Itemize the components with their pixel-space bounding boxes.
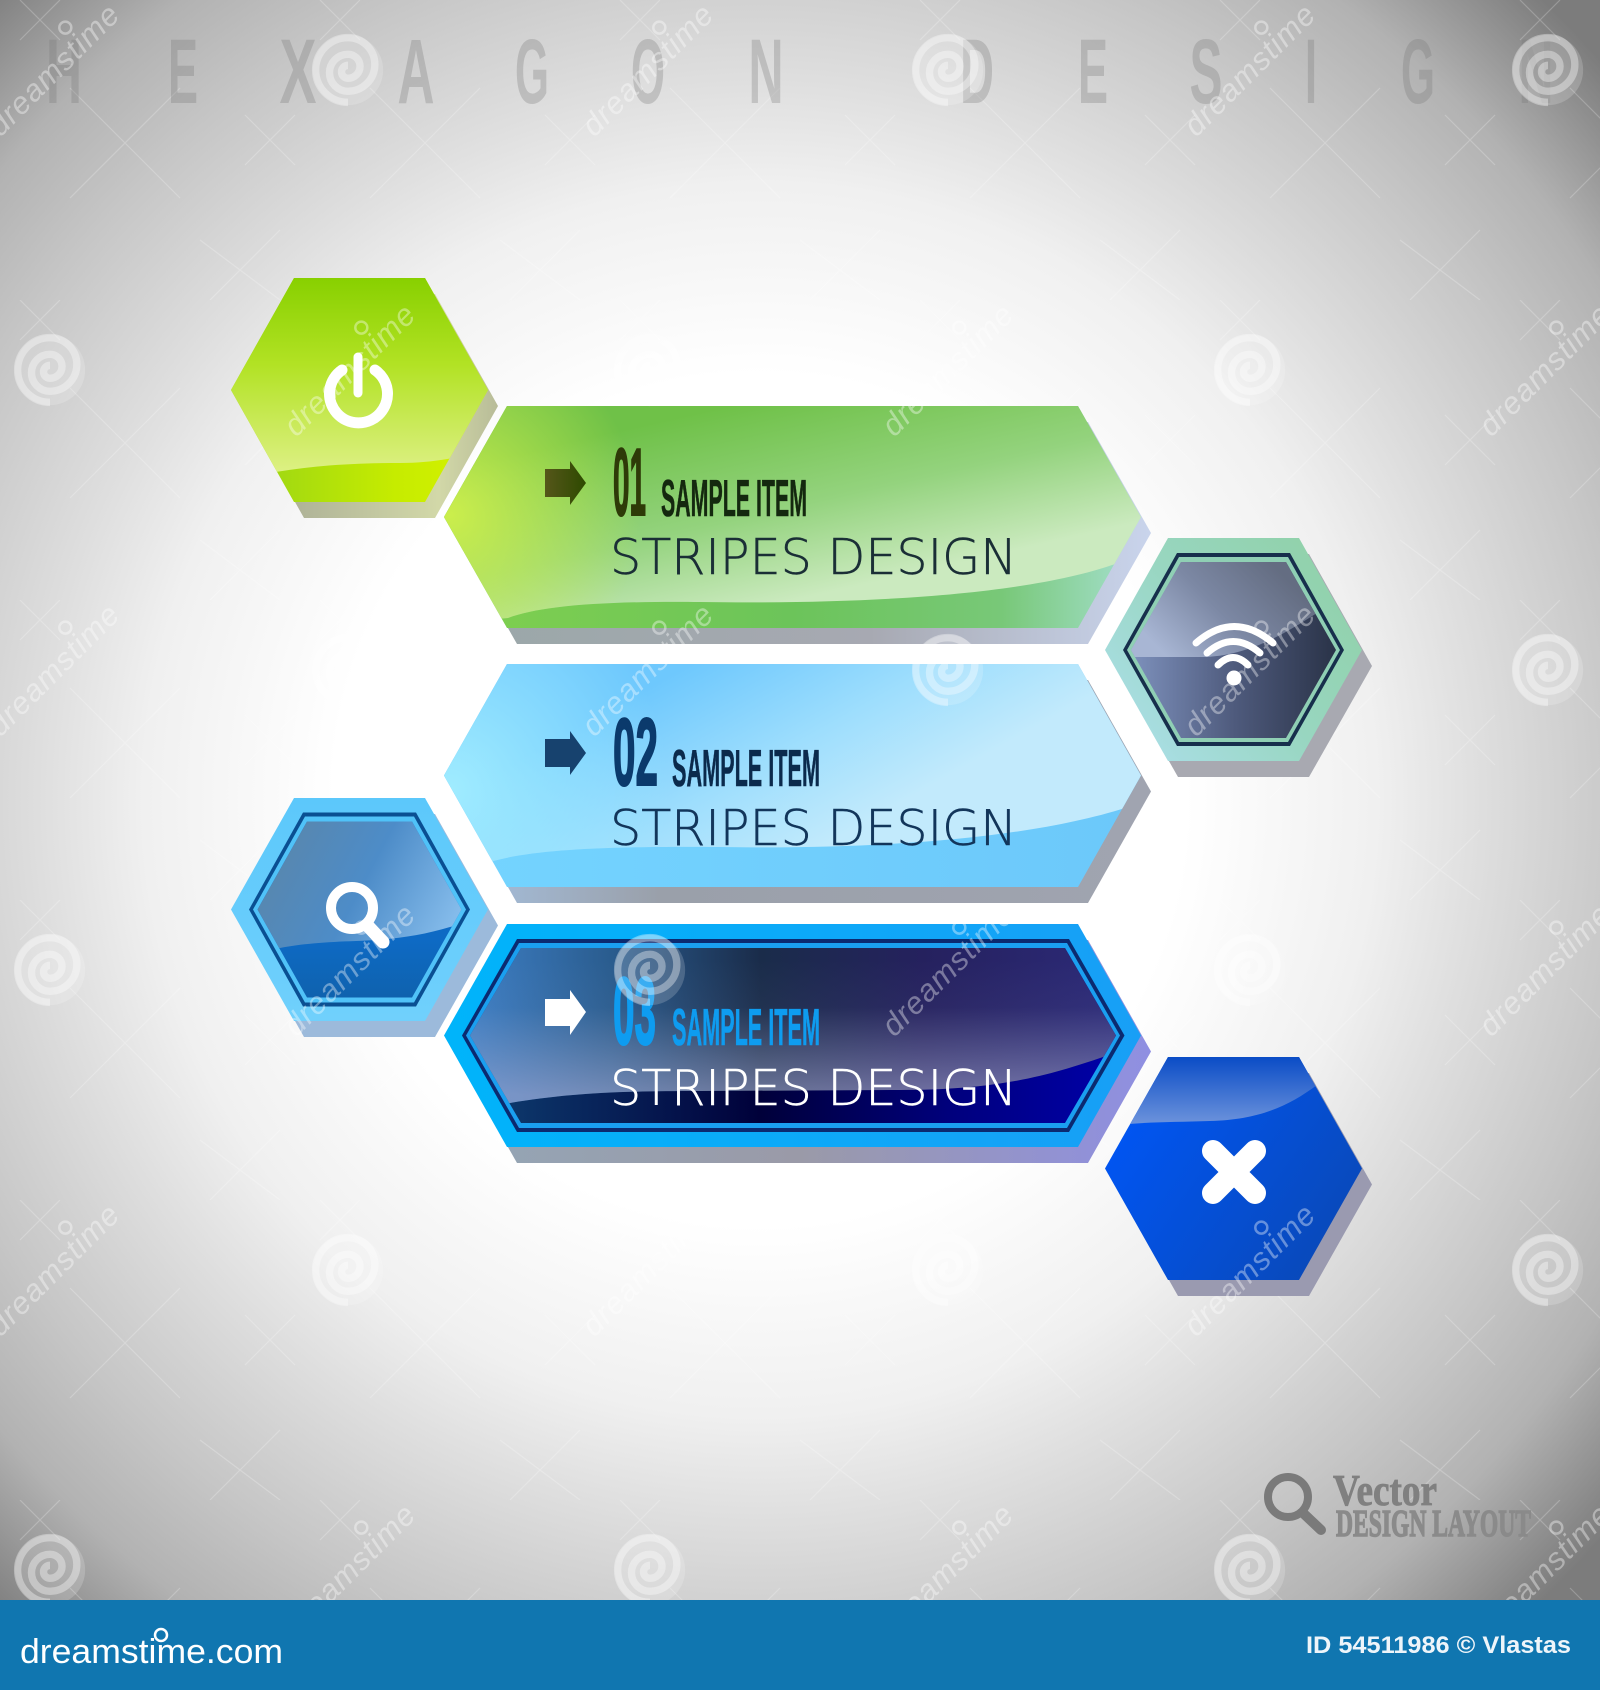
text: stripes design: STRIPES DESIGN bbox=[610, 800, 1017, 857]
panel: item 03: 03 bbox=[613, 958, 656, 1065]
arrow bbox=[545, 461, 586, 505]
title: hexagon design: G bbox=[1401, 21, 1435, 123]
title: hexagon design: H bbox=[46, 21, 82, 123]
title: hexagon design: A bbox=[398, 21, 434, 123]
panel: item 01: SAMPLE ITEM bbox=[661, 470, 807, 528]
text: image id and credit: ID 54511986 © Vlastas bbox=[1306, 1632, 1571, 1659]
watermark: dreamstime text: dreamstime bbox=[1176, 596, 1323, 743]
watermark: dreamstime text: dreamstime bbox=[874, 296, 1021, 443]
title: hexagon design: G bbox=[515, 21, 549, 123]
hexagon: search icon bbox=[231, 798, 498, 1037]
title: hexagon design: E bbox=[1078, 21, 1108, 123]
panel: item 03 bbox=[444, 924, 1151, 1163]
panel: item 01 bbox=[430, 400, 1151, 644]
hexagon: wifi icon bbox=[1105, 538, 1372, 777]
text: stripes design: STRIPES DESIGN bbox=[610, 529, 1017, 586]
title: hexagon design: I bbox=[1305, 21, 1317, 123]
icon: wifi bbox=[1196, 626, 1273, 686]
watermark: dreamstime text: dreamstime bbox=[276, 896, 423, 1043]
watermark: dreamstime text: dreamstime bbox=[1176, 1196, 1323, 1343]
watermark: dreamstime text: dreamstime bbox=[874, 896, 1021, 1043]
hexagon: close icon bbox=[1100, 1050, 1372, 1296]
title: hexagon design: N bbox=[748, 21, 784, 123]
hexagon: power icon bbox=[220, 270, 500, 518]
logo: vector design layout bbox=[1268, 1466, 1531, 1545]
watermark: dreamstime text: dreamstime bbox=[574, 596, 721, 743]
watermark: dreamstime text: dreamstime bbox=[874, 1496, 1021, 1643]
title: hexagon design: E bbox=[168, 21, 198, 123]
title: hexagon design: D bbox=[960, 21, 994, 123]
icon: magnifier bbox=[331, 887, 383, 942]
footer banner bbox=[0, 1600, 1600, 1690]
title: hexagon design: O bbox=[631, 21, 665, 123]
title: hexagon design: X bbox=[280, 21, 316, 123]
watermark: dreamstime text: dreamstime bbox=[1176, 0, 1323, 143]
panel: item 01: 01 bbox=[613, 429, 646, 536]
icon: close bbox=[1213, 1151, 1255, 1193]
watermark: dreamstime text: dreamstime bbox=[574, 0, 721, 143]
watermark: dreamstime text: dreamstime bbox=[276, 1496, 423, 1643]
title: hexagon design: S bbox=[1190, 21, 1222, 123]
icon: power bbox=[329, 357, 387, 423]
title: hexagon design: N bbox=[1518, 21, 1554, 123]
watermark: dreamstime text: dreamstime bbox=[276, 296, 423, 443]
text: stripes design: STRIPES DESIGN bbox=[610, 1060, 1017, 1117]
title: hexagon design bbox=[46, 21, 1554, 123]
panel: item 03: SAMPLE ITEM bbox=[672, 999, 820, 1057]
logo: dreamstime.com: dreamstime.com bbox=[20, 1633, 283, 1671]
arrow bbox=[545, 731, 586, 775]
panel: item 02 bbox=[430, 660, 1151, 903]
arrow bbox=[545, 990, 586, 1035]
watermark: dreamstime text: dreamstime bbox=[574, 1196, 721, 1343]
panel: item 02: SAMPLE ITEM bbox=[672, 740, 820, 798]
panel: item 02: 02 bbox=[613, 699, 658, 806]
logo: vector design layout: Vector bbox=[1333, 1466, 1437, 1515]
